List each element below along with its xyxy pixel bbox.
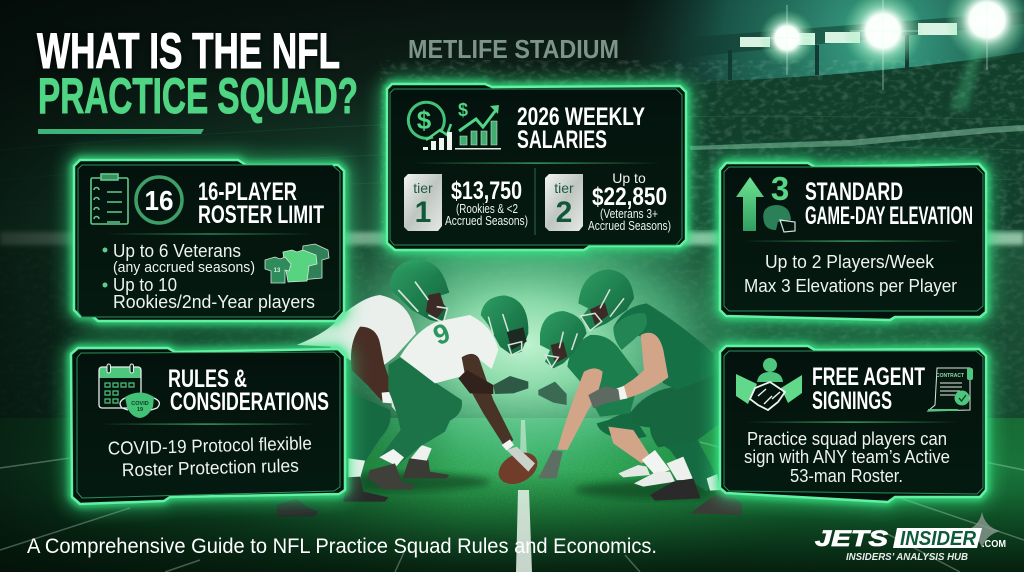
bullets: Rookies/2nd-Year players <box>113 291 315 312</box>
tier 1: tier <box>413 180 433 196</box>
helmet <box>578 269 634 331</box>
body text: Up to 2 Players/Week <box>765 251 935 272</box>
tier 1: (Rookies & <2 <box>456 201 518 216</box>
tier 2: (Veterans 3+ <box>600 206 658 221</box>
icon: helmet <box>763 205 795 232</box>
bullets: Up to 6 Veterans <box>113 240 241 261</box>
heading <box>517 103 645 154</box>
tier 2: 2 <box>556 196 572 229</box>
body text <box>108 432 312 480</box>
tier 1: 1 <box>415 196 431 229</box>
panel: rules and considerations <box>71 348 345 504</box>
tier 2 <box>545 170 671 233</box>
icon: handshake <box>736 358 802 410</box>
icon: 16 badge <box>136 177 182 223</box>
helmet <box>481 295 528 355</box>
title: PRACTICE SQUAD? <box>38 68 358 124</box>
player: far right <box>578 269 742 515</box>
body text <box>744 429 950 486</box>
logo: Jets Insider: .COM <box>982 539 1006 550</box>
logo: Jets Insider: INSIDER <box>900 528 977 550</box>
heading: FREE AGENT <box>812 363 925 391</box>
player: center: 9 <box>429 317 454 351</box>
tier 2: Up to <box>612 170 646 186</box>
body text: Roster Protection rules <box>122 455 299 480</box>
icon: calendar and mask: COVID <box>131 401 149 407</box>
tier 2: $22,850 <box>592 183 667 211</box>
body text: Practice squad players can <box>747 429 947 449</box>
ball <box>493 446 543 490</box>
body text: sign with ANY team’s Active <box>744 447 950 467</box>
icon: contract: CONTRACT <box>936 373 964 379</box>
player: far left lineman <box>277 259 449 517</box>
icon: dollar growth: $ <box>417 105 432 135</box>
title: WHAT IS THE NFL <box>37 23 340 79</box>
bullets <box>102 240 315 312</box>
footer subtitle: A Comprehensive Guide to NFL Practice Squad Rules and Economics. <box>27 535 657 558</box>
tier 1 <box>404 174 528 231</box>
icon: bar chart arrow <box>455 100 501 150</box>
heading: RULES & <box>168 365 247 393</box>
tier 1: Accrued Seasons) <box>445 213 528 228</box>
heading: STANDARD <box>805 178 903 206</box>
icon: jerseys: 13 <box>274 268 281 274</box>
heading <box>198 178 324 229</box>
panel: roster limit <box>74 160 344 321</box>
tier 2: Accrued Seasons) <box>588 218 671 233</box>
icon: calendar and mask: 19 <box>137 407 143 413</box>
icon: bar chart arrow: $ <box>458 100 468 120</box>
heading: ROSTER LIMIT <box>198 201 324 229</box>
body text: 53-man Roster. <box>790 466 903 486</box>
title: WHAT IS THE NFL <box>37 23 340 79</box>
body text <box>744 251 957 296</box>
icon: contract <box>928 368 973 411</box>
panel: game-day elevation <box>720 163 986 320</box>
icon: calendar and mask <box>99 364 159 418</box>
bullets: Up to 10 <box>113 274 177 295</box>
heading: 2026 WEEKLY <box>517 103 645 131</box>
heading: CONSIDERATIONS <box>170 388 329 416</box>
players at the line of scrimmage <box>277 259 742 517</box>
heading: SALARIES <box>517 126 607 154</box>
heading <box>805 178 973 230</box>
icon: clipboard <box>91 174 128 224</box>
logo: Jets Insider: INSIDERS’ ANALYSIS HUB <box>846 552 968 563</box>
bullets: (any accrued seasons) <box>113 259 255 276</box>
tier 1: $13,750 <box>451 177 522 205</box>
body text: COVID-19 Protocol flexible <box>108 432 312 459</box>
heading: 16-PLAYER <box>198 178 297 206</box>
helmet <box>540 311 587 368</box>
panel: weekly salaries <box>387 84 686 250</box>
logo: Jets Insider: JETS <box>815 526 888 551</box>
icon: jerseys <box>265 244 329 283</box>
tier 2: tier <box>554 180 574 196</box>
stadium sign: METLIFE STADIUM <box>408 34 619 64</box>
title <box>37 23 358 134</box>
icon: 16 badge: 16 <box>144 185 174 216</box>
helmet <box>390 259 449 323</box>
heading <box>168 365 329 416</box>
heading: SIGNINGS <box>812 387 892 415</box>
number 3: 3 <box>771 170 789 207</box>
player: center <box>367 295 543 490</box>
body text: Max 3 Elevations per Player <box>744 275 957 296</box>
stadium light rig <box>680 0 1024 110</box>
panel: free agent signings <box>720 346 986 502</box>
heading <box>812 363 925 415</box>
player: center right <box>538 311 675 487</box>
logo: Jets Insider <box>815 512 1006 563</box>
icon: up arrow <box>736 177 764 231</box>
icon: dollar growth <box>408 102 452 150</box>
